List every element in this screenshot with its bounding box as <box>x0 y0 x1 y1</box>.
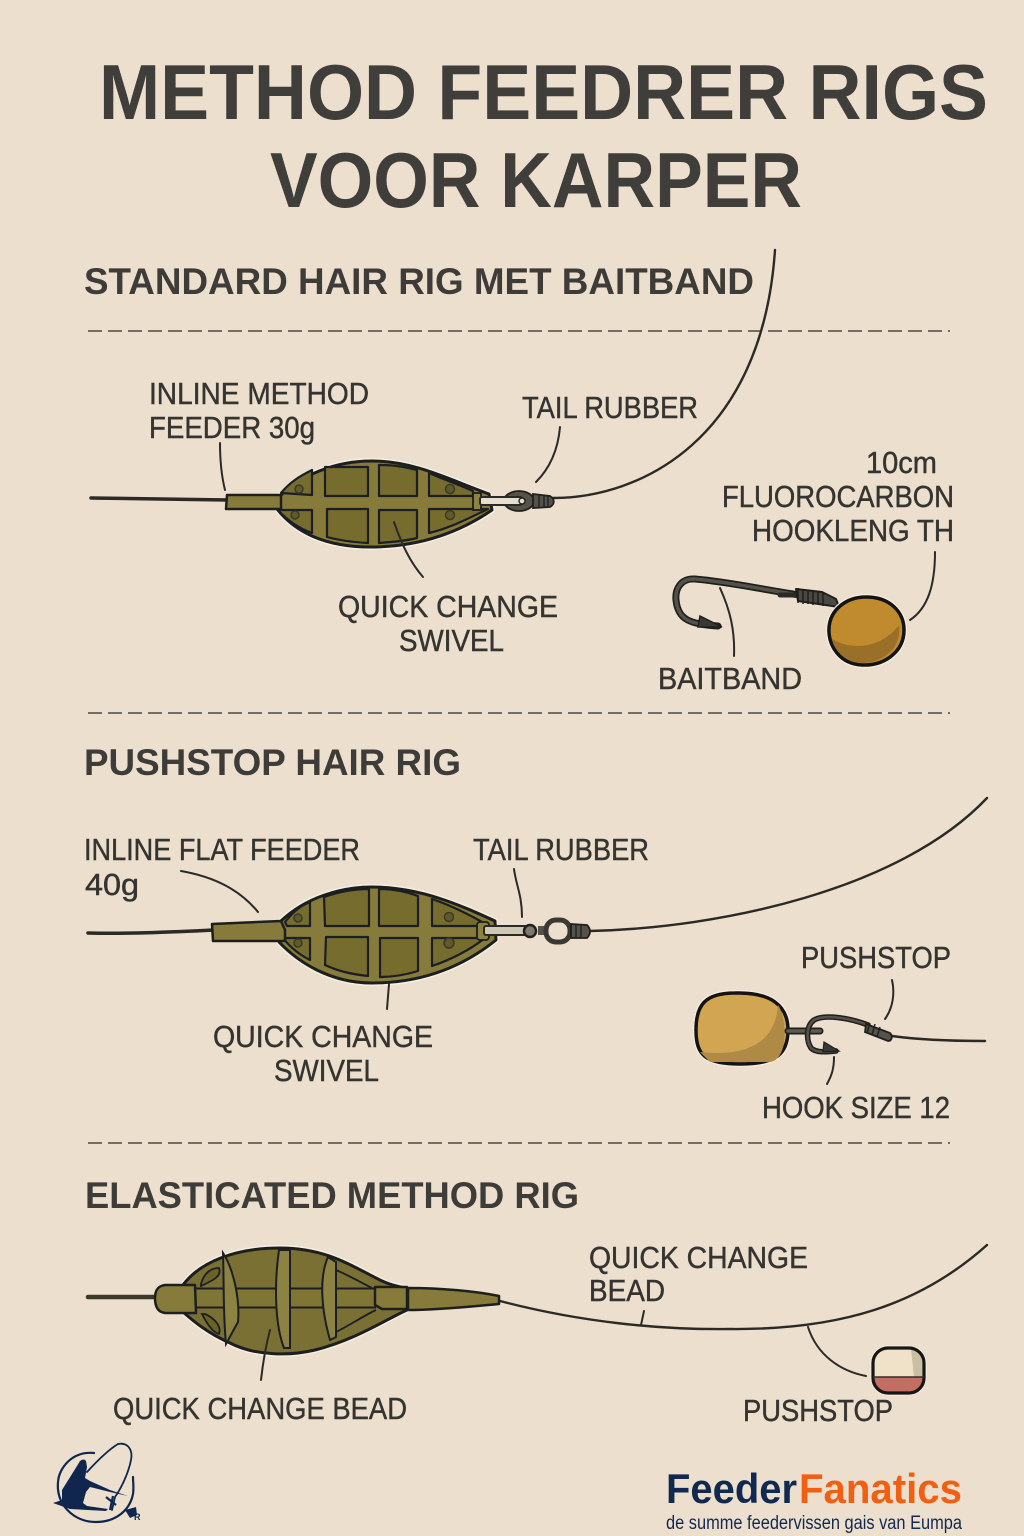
label: baitband <box>658 588 802 696</box>
rig 1: swivel and tail rubber <box>473 491 554 511</box>
heading: pushstop hair rig: PUSHSTOP HAIR RIG <box>84 742 461 783</box>
label: quick change swivel <box>338 522 558 658</box>
label: pushstop <box>801 940 951 1019</box>
rig 2: swivel and tail rubber <box>477 920 590 942</box>
rig 1: main line <box>553 250 775 498</box>
label: fluorocarbon hooklength <box>722 445 954 620</box>
logo: angler emblem: R <box>134 1512 141 1522</box>
label: hook size <box>762 1057 950 1125</box>
label: baitband: BAITBAND <box>658 661 802 696</box>
rig 2: main line <box>590 798 987 931</box>
rig 2: pushstop bait and hook <box>696 993 985 1064</box>
rig 3: pushstop bead <box>873 1348 924 1393</box>
label: inline method feeder: INLINE METHOD <box>149 376 369 411</box>
title <box>99 48 988 224</box>
label: tail rubber <box>522 390 698 482</box>
label: inline flat feeder: INLINE FLAT FEEDER <box>84 832 360 867</box>
label: quick change bead (feeder): QUICK CHANGE BEAD <box>113 1391 407 1426</box>
label: quick change swivel <box>213 984 433 1088</box>
rig 1: inline method feeder <box>91 461 492 547</box>
label: tail rubber: TAIL RUBBER <box>522 390 698 425</box>
logo: FeederFanatics wordmark: Feeder <box>666 1465 797 1512</box>
label: quick change bead (line) <box>589 1240 808 1325</box>
logo: FeederFanatics wordmark: de summe feedervissen gais van Eumpa <box>666 1513 962 1534</box>
label: fluorocarbon hooklength: 10cm <box>866 445 937 480</box>
logo: FeederFanatics wordmark: Fanatics <box>799 1465 962 1512</box>
label: quick change bead (line): BEAD <box>589 1273 665 1308</box>
title: VOOR KARPER <box>270 136 802 224</box>
rig 2: inline flat feeder <box>88 887 496 983</box>
rig 1: hook with boilie <box>676 579 904 665</box>
label: quick change bead (feeder) <box>113 1330 407 1426</box>
label: pushstop: PUSHSTOP <box>801 940 951 975</box>
label: quick change swivel: QUICK CHANGE <box>213 1019 433 1054</box>
rig 3: main line <box>500 1245 987 1329</box>
label: fluorocarbon hooklength: FLUOROCARBON <box>722 479 954 514</box>
label: fluorocarbon hooklength: HOOKLENG TH <box>752 513 954 548</box>
label: quick change swivel: QUICK CHANGE <box>338 589 558 624</box>
title: METHOD FEEDRER RIGS <box>99 48 988 136</box>
label: inline method feeder <box>149 376 369 490</box>
label: quick change swivel: SWIVEL <box>274 1053 379 1088</box>
logo: angler emblem <box>53 1444 141 1522</box>
label: inline method feeder: FEEDER 30g <box>149 410 315 445</box>
label: inline flat feeder: 40g <box>85 867 139 902</box>
label: tail rubber <box>473 832 649 917</box>
label: inline flat feeder <box>84 832 360 912</box>
label: pushstop <box>743 1327 893 1428</box>
heading: elasticated method rig: ELASTICATED METHOD RIG <box>85 1175 579 1216</box>
label: quick change swivel: SWIVEL <box>399 623 504 658</box>
logo: FeederFanatics wordmark <box>666 1465 962 1534</box>
rig 3: elasticated feeder <box>88 1248 499 1354</box>
label: tail rubber: TAIL RUBBER <box>473 832 649 867</box>
heading: standard hair rig: STANDARD HAIR RIG MET BAITBAND <box>84 261 754 302</box>
label: pushstop: PUSHSTOP <box>743 1393 893 1428</box>
label: hook size: HOOK SIZE 12 <box>762 1090 950 1125</box>
label: quick change bead (line): QUICK CHANGE <box>589 1240 808 1275</box>
